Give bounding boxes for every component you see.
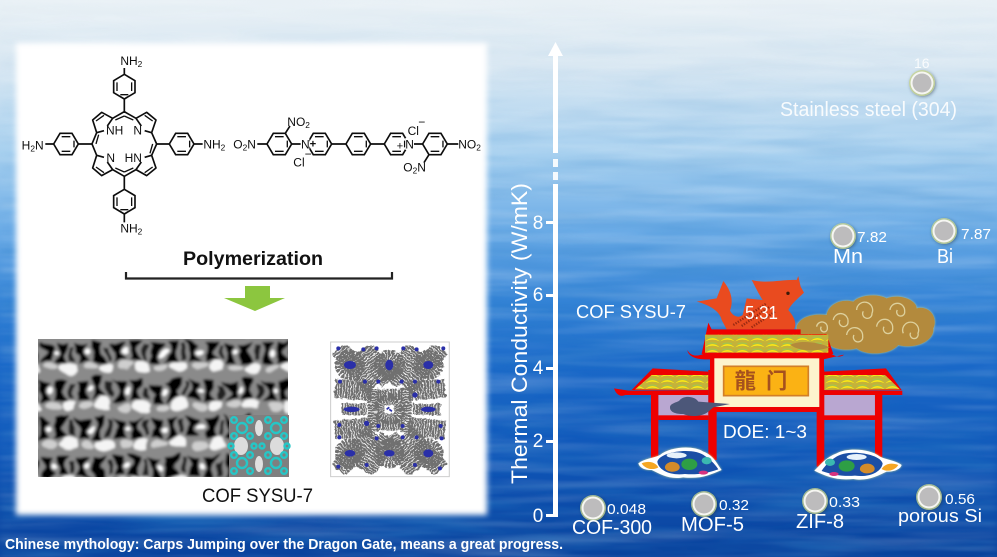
data label: COF SYSU-7 5.31: COF SYSU-7 — [576, 302, 686, 322]
data point: Bi: Bi — [937, 246, 953, 268]
molecule: tetraaminophenyl porphyrin: 2 — [221, 143, 226, 153]
illustration: dragon gate with carp — [614, 276, 935, 480]
cloud: golden cloud behind the gate — [797, 295, 935, 353]
label: COF SYSU-7: COF SYSU-7 — [202, 486, 313, 507]
data point: MOF-5: MOF-5 — [681, 514, 744, 536]
molecule: tetraaminophenyl porphyrin — [22, 54, 226, 236]
molecule: dinitrophenyl viologen dichloride: N — [301, 138, 310, 152]
data label: DOE: DOE: 1~3 — [723, 422, 807, 442]
cloud: colourful right base cloud — [814, 450, 902, 480]
axis tick labels — [533, 213, 544, 527]
axis tick labels: 6 — [533, 285, 543, 306]
molecule: dinitrophenyl viologen dichloride: + — [310, 138, 317, 150]
data label: COF SYSU-7 5.31: 5.31 — [745, 303, 778, 323]
data point: Mn: 7.82 — [857, 229, 887, 246]
molecule: dinitrophenyl viologen dichloride: O — [403, 160, 413, 174]
data point: stainless steel: Stainless steel (304) — [780, 99, 957, 121]
data point: COF-300: COF-300 — [572, 517, 652, 539]
arrow: green down arrow — [224, 286, 285, 311]
gate central plaque — [710, 355, 824, 412]
data point: Bi: 7.87 — [961, 226, 991, 243]
gate central plaque: 龍门 — [735, 370, 797, 394]
data point: MOF-5 — [681, 491, 749, 536]
data point: stainless steel: 16 — [914, 55, 930, 71]
molecule: dinitrophenyl viologen dichloride: 2 — [305, 120, 310, 130]
cloud: small dark cloud — [670, 397, 730, 416]
cloud: colourful left base cloud — [638, 448, 722, 478]
image: TEM micrograph — [38, 339, 288, 477]
heading: Polymerization: Polymerization — [183, 249, 323, 270]
data point: ZIF-8: ZIF-8 — [796, 511, 844, 533]
axis line with break and arrow head — [546, 42, 563, 517]
molecule: dinitrophenyl viologen dichloride: 2 — [243, 143, 248, 153]
molecule: dinitrophenyl viologen dichloride: Cl — [293, 156, 305, 170]
molecule: dinitrophenyl viologen dichloride: 2 — [413, 165, 418, 175]
data point: Mn: Mn — [833, 246, 863, 268]
molecule: tetraaminophenyl porphyrin: 2 — [138, 59, 143, 69]
molecule: tetraaminophenyl porphyrin: N — [106, 151, 115, 165]
molecule: tetraaminophenyl porphyrin: N — [35, 139, 44, 153]
panel: COF synthesis — [16, 43, 487, 515]
molecule: dinitrophenyl viologen dichloride — [233, 115, 481, 175]
axis title: Thermal Conductivity (W/mK) — [507, 183, 532, 484]
data label: COF SYSU-7 5.31 — [576, 302, 778, 323]
bracket — [126, 272, 392, 278]
data point: COF-300: 0.048 — [607, 501, 646, 518]
data point: porous Si — [898, 484, 982, 526]
caption: mythology note: Chinese mythology: Carps Jumping over the Dragon Gate, means a great progress. — [5, 536, 563, 553]
molecule: dinitrophenyl viologen dichloride: N — [405, 138, 414, 152]
data point: stainless steel — [780, 55, 957, 121]
image: cyan lattice overlay inset — [228, 415, 290, 477]
gate roof top — [687, 323, 844, 359]
molecule: dinitrophenyl viologen dichloride: O — [233, 138, 243, 152]
data point: MOF-5: 0.32 — [719, 497, 749, 514]
data point: porous Si: porous Si — [898, 506, 982, 526]
molecule: tetraaminophenyl porphyrin: 2 — [30, 144, 35, 154]
molecule: dinitrophenyl viologen dichloride: N — [247, 138, 256, 152]
image: crystal structure model — [331, 342, 449, 477]
axis tick labels: 4 — [533, 358, 544, 379]
data point: Mn — [830, 223, 887, 268]
molecule: dinitrophenyl viologen dichloride: − — [418, 115, 425, 129]
molecule: dinitrophenyl viologen dichloride: NO — [287, 115, 305, 129]
molecule: tetraaminophenyl porphyrin: H — [22, 139, 30, 153]
molecule: dinitrophenyl viologen dichloride: NO — [458, 138, 476, 152]
data point: porous Si: 0.56 — [945, 491, 975, 508]
axis tick labels: 8 — [533, 213, 543, 234]
molecule: dinitrophenyl viologen dichloride: 2 — [476, 143, 481, 153]
chart: thermal conductivity axis — [507, 42, 563, 527]
molecule: tetraaminophenyl porphyrin: HN — [125, 151, 142, 165]
molecule: tetraaminophenyl porphyrin: NH — [106, 124, 123, 138]
data point: ZIF-8: 0.33 — [829, 494, 860, 511]
side roofs — [614, 368, 902, 396]
data point: COF-300 — [572, 495, 652, 539]
molecule: tetraaminophenyl porphyrin: N — [133, 124, 142, 138]
carp pair — [697, 276, 804, 329]
molecule: dinitrophenyl viologen dichloride: − — [305, 147, 312, 161]
molecule: tetraaminophenyl porphyrin: 2 — [138, 226, 143, 236]
molecule: dinitrophenyl viologen dichloride: Cl — [408, 124, 419, 138]
gate lintels and posts — [651, 370, 882, 467]
molecule: tetraaminophenyl porphyrin: NH — [120, 54, 138, 68]
data point: Bi — [931, 218, 991, 268]
data point: ZIF-8 — [796, 488, 860, 533]
molecule: dinitrophenyl viologen dichloride: N — [417, 160, 426, 174]
molecule: tetraaminophenyl porphyrin: NH — [120, 221, 138, 235]
axis tick labels: 2 — [533, 431, 543, 452]
axis tick labels: 0 — [533, 506, 543, 527]
molecule: dinitrophenyl viologen dichloride: + — [397, 140, 404, 152]
molecule: tetraaminophenyl porphyrin: NH — [203, 138, 221, 152]
